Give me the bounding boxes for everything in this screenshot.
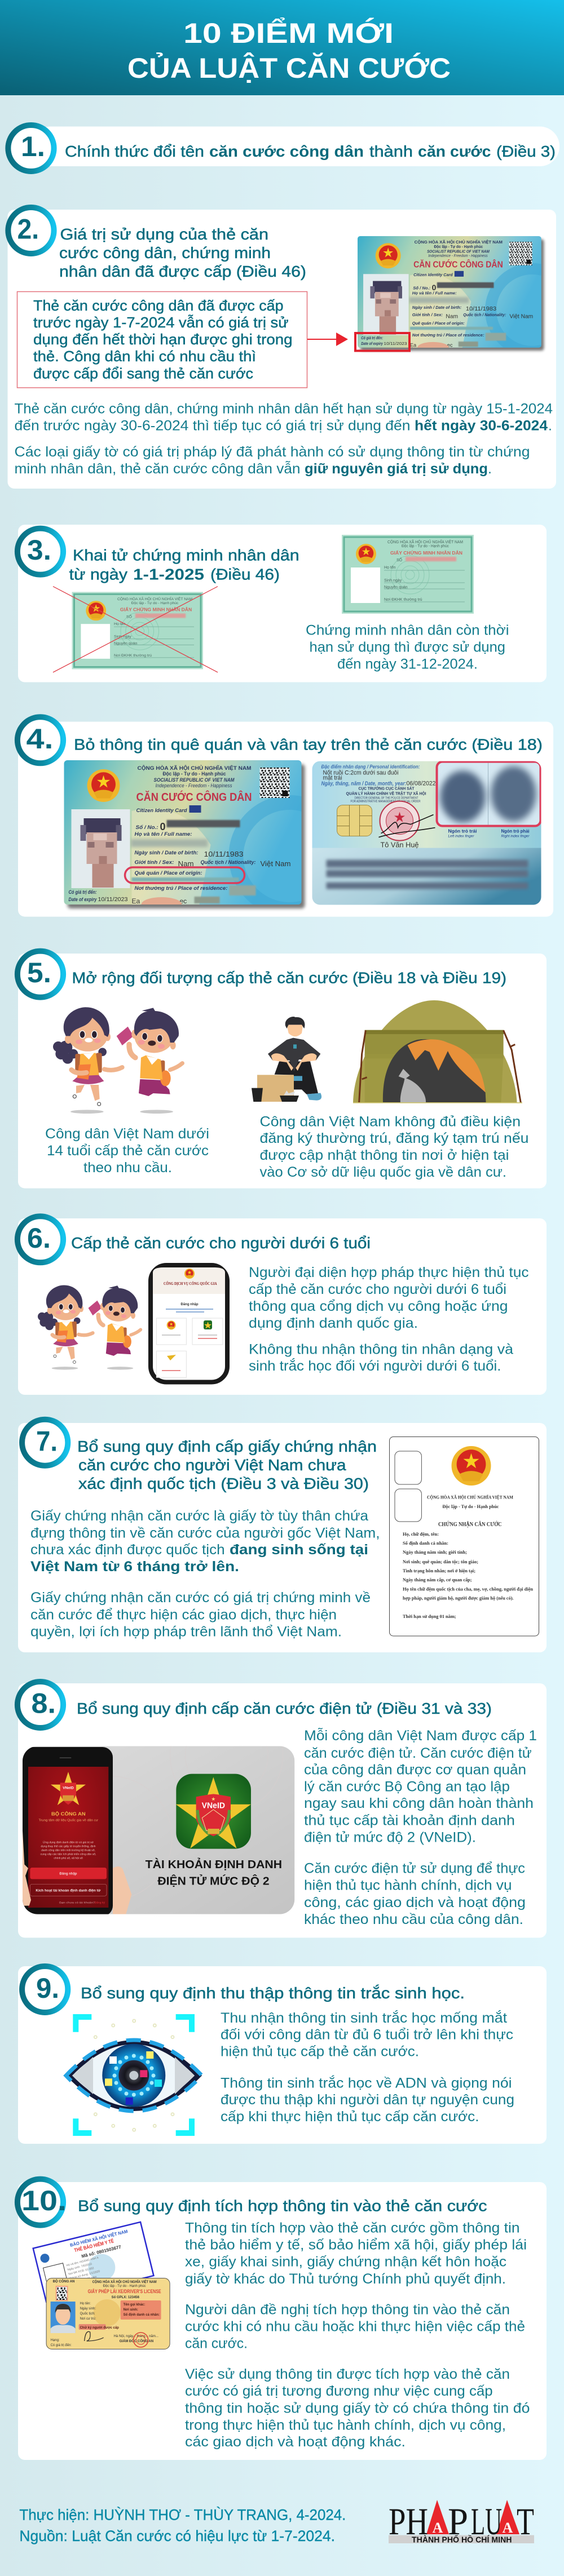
illustration: homeless man: [252, 1017, 321, 1102]
body text: đến trước ngày 30-6-2024 thì tiếp tục có giá trị sử dụng đến: [15, 418, 411, 433]
id card back: mặt trái: [323, 775, 342, 782]
panel: point 5: [17, 951, 547, 1189]
document: identity certificate: Số định danh cá nhân:: [403, 1540, 448, 1546]
id card front image: Họ và tên / Full name:: [412, 292, 457, 296]
id card front image: SOCIALIST REPUBLIC OF VIET NAM: [427, 250, 490, 254]
document: identity certificate: Thời hạn sử dụng 01 năm;: [403, 1613, 456, 1619]
heading: rename: thành: [369, 143, 413, 160]
heading: 1-1-2025: [133, 566, 204, 583]
id card back: Left index finger: [448, 835, 475, 839]
id card front: 10/11/1983: [204, 850, 244, 858]
callout box: được cấp đổi sang thẻ căn cước: [33, 365, 253, 382]
body text: Thu nhận thông tin sinh trắc học mống mắt: [221, 2010, 507, 2026]
id card front image: Date of expiry: [361, 342, 384, 346]
image: driver license: CỘNG HÒA XÃ HỘI CHỦ NGHĨA VIỆT NAM: [92, 2280, 157, 2284]
header banner: [0, 0, 564, 95]
title: [127, 17, 451, 84]
badge: number 10: [17, 2179, 67, 2225]
body text: hiện thủ tục cấp thẻ căn cước.: [221, 2044, 419, 2060]
body text: [221, 2010, 514, 2125]
document: identity certificate: hợp pháp, người giám hộ, người được giám hộ (nếu có).: [403, 1595, 514, 1601]
panel: point 10: [17, 2179, 547, 2460]
valid id card: GIẤY CHỨNG MINH NHÂN DÂN: [390, 550, 462, 556]
id card front: Ea: [132, 897, 140, 905]
heading: rename: [65, 143, 556, 160]
old id card crossed: Nguyên quán: [114, 641, 137, 645]
image: VNeID app: dụng thay thế các giấy tờ truyền thống, định: [41, 1845, 96, 1848]
illustration: children: [38, 1285, 140, 1369]
body text: chưa xác định được quốc tịch: [30, 1542, 225, 1558]
id card front image: CĂN CƯỚC CÔNG DÂN: [413, 260, 503, 270]
image: driver license: Số GPLX: 123456: [112, 2295, 140, 2299]
old id card crossed: Độc lập - Tự do - Hạnh phúc: [131, 601, 179, 605]
body text: [30, 1508, 380, 1640]
document: identity certificate: CỘNG HÒA XÃ HỘI CHỦ NGHĨA VIỆT NAM: [427, 1495, 513, 1500]
body text: Người dân đề nghị tích hợp thông tin vào thẻ căn: [185, 2302, 510, 2317]
body text: căn cước.: [185, 2336, 248, 2352]
text: children: 14 tuổi cấp thẻ căn cước: [47, 1143, 209, 1159]
old id card crossed: CỘNG HÒA XÃ HỘI CHỦ NGHĨA VIỆT NAM: [117, 596, 192, 601]
image: VNeID app: ĐIỆN TỬ MỨC ĐỘ 2: [157, 1874, 270, 1887]
red cross: [53, 587, 218, 672]
id card back: Ngón trỏ phải: [501, 829, 529, 834]
id card back: 06/08/2022: [406, 781, 435, 787]
image: VNeID app: chính phủ số, xã hội số: [54, 1856, 83, 1860]
body text: cấp khi thực hiện thủ tục cấp căn cước.: [221, 2109, 479, 2125]
text: children: theo nhu cầu.: [83, 1160, 172, 1176]
logo: Pháp Luật: A: [503, 2520, 513, 2536]
body text: khác theo nhu cầu của công dân.: [304, 1912, 523, 1927]
valid id card: Độc lập - Tự do - Hạnh phúc: [402, 544, 449, 548]
badge: number 4: [17, 717, 63, 763]
text: under 6: sinh trắc học đối với người dưới 6 tuổi.: [249, 1358, 501, 1374]
valid id card: Nguyên quán: [384, 586, 408, 589]
body text: căn cước để thực hiện các giao dịch, thực hiện: [30, 1607, 337, 1623]
callout box: [17, 292, 307, 388]
image: VNeID app: danh công dân trên môi trường kỹ thuật số,: [41, 1848, 95, 1852]
text: children: Công dân Việt Nam dưới: [45, 1126, 209, 1142]
text: under 6: dụng định danh quốc gia.: [249, 1315, 418, 1331]
image: driver license: Có giá trị đến:: [51, 2344, 72, 2347]
body text: đối với công dân từ đủ 6 tuổi trở lên khi thực: [221, 2027, 513, 2043]
panel: point 8: [17, 1682, 547, 1937]
id card back: CỤC TRƯỞNG CỤC CẢNH SÁT: [359, 786, 415, 791]
heading: [77, 1438, 377, 1492]
image: VNeID app: Trung tâm dữ liệu Quốc gia về dân cư: [38, 1819, 98, 1823]
credits: Thực hiện: HUỲNH THƠ - THÙY TRANG, 4-2024.: [19, 2506, 346, 2524]
image: VNeID app: [23, 1746, 294, 1914]
body text: Giấy chứng nhận căn cước có giá trị chứng minh về: [30, 1590, 371, 1606]
text: validity note: Chứng minh nhân dân còn thời: [306, 623, 509, 639]
callout box: trước ngày 1-7-2024 vẫn có giá trị sử: [33, 314, 289, 331]
id card front: SOCIALIST REPUBLIC OF VIET NAM: [153, 777, 235, 783]
valid id card: Nơi ĐKHK thường trú: [384, 598, 422, 602]
id card front image: 10/11/1983: [466, 306, 497, 312]
body text: Thông tin tích hợp vào thẻ căn cước gồm thông tin: [185, 2220, 520, 2236]
body text: của công dân được cơ quan quản: [304, 1762, 526, 1778]
badge: number 5: 5.: [27, 957, 51, 988]
text: children: [45, 1126, 209, 1176]
document: identity certificate: Họ tên chữ đệm quốc tịch của cha, mẹ, vợ, chồng, người đại diện: [403, 1586, 533, 1592]
id card back: Right index finger: [501, 835, 530, 839]
phone mockup: public service portal: Đăng nhập: [180, 1303, 199, 1306]
body text: thẻ bảo hiểm y tế, số bảo hiểm xã hội, giấy phép lái: [185, 2237, 527, 2253]
logo: Pháp Luật: [389, 2500, 534, 2545]
credits: Nguồn: Luật Căn cước có hiệu lực từ 1-7-2024.: [19, 2528, 335, 2544]
id card front: Việt Nam: [261, 859, 291, 868]
logo: Pháp Luật: PH: [389, 2500, 428, 2543]
badge: number 8: 8.: [32, 1688, 56, 1719]
id card front image: Số / No.:: [413, 286, 430, 290]
panel: point 6: [17, 1216, 547, 1395]
old id card crossed: Họ tên: [114, 622, 126, 626]
body text: xe, giấy khai sinh, giấy chứng nhận kết hôn hoặc: [185, 2254, 506, 2270]
image: health insurance card: BẢO HIỂM XÃ HỘI VIỆT NAM: [69, 2229, 129, 2248]
heading: rename: (Điều 3): [496, 143, 556, 160]
icon: eye scan: [66, 2014, 202, 2136]
phone mockup: public service portal: [151, 1265, 227, 1382]
badge: number 6: [17, 1216, 63, 1262]
body text: ngay sau khi công dân hoàn thành: [304, 1795, 534, 1811]
image: driver license: Nơi cư trú:: [80, 2317, 96, 2321]
image: health insurance card: Ngày sinh: 7/6/2010: [67, 2263, 92, 2272]
panel: point 7: [18, 1420, 547, 1652]
image: driver license: BỘ CÔNG AN: [53, 2279, 74, 2284]
body text: giữ nguyên giá trị sử dụng: [305, 461, 488, 477]
image: VNeID app: VNeID: [202, 1801, 225, 1810]
valid id card: Sinh ngày: [384, 579, 402, 583]
id card front image: [358, 236, 564, 353]
highlight: expiry date: [355, 333, 409, 351]
body text: [304, 1727, 537, 1927]
logo: Pháp Luật: A: [433, 2520, 443, 2536]
id card front image: Citizen Identity Card: [413, 273, 453, 277]
image: driver license: Hạng:: [51, 2339, 60, 2342]
image: VNeID app: BỘ CÔNG AN: [51, 1811, 86, 1817]
body text: căn cước điện tử. Căn cước điện tử: [304, 1745, 532, 1761]
body text: .: [548, 418, 552, 433]
id card back: QUẢN LÝ HÀNH CHÍNH VỀ TRẬT TỰ XÃ HỘI: [346, 791, 426, 796]
logo: Pháp Luật: THÀNH PHỐ HỒ CHÍ MINH: [412, 2535, 512, 2545]
id card back: Đặc điểm nhân dạng / Personal identification:: [321, 764, 420, 770]
image: VNeID app: Đăng ký: [95, 1901, 105, 1904]
image: VNeID app: TÀI KHOẢN ĐỊNH DANH: [146, 1858, 282, 1871]
panel: point 2: [8, 207, 564, 489]
document: identity certificate: [389, 1437, 539, 1636]
valid id card: [342, 535, 474, 614]
id card front: 10/11/2023: [98, 897, 128, 903]
body text: quyền, lợi ích hợp pháp trên lãnh thổ Việt Nam.: [30, 1624, 342, 1640]
id card front image: Quê quán / Place of origin:: [412, 322, 465, 326]
id card front image: Nam: [446, 313, 458, 320]
id card front image: CỘNG HÒA XÃ HỘI CHỦ NGHĨA VIỆT NAM: [415, 240, 503, 245]
text: under 6: cấp thẻ căn cước cho người dưới 6 tuổi: [249, 1282, 506, 1297]
callout box: thẻ. Công dân khi có nhu cầu thì: [33, 348, 256, 365]
text: no residence: được cập nhật thông tin nơi ở hiện tại: [259, 1147, 509, 1163]
image: driver license: Độc lập - Tự do - Hạnh phúc: [103, 2285, 146, 2288]
id card front: CỘNG HÒA XÃ HỘI CHỦ NGHĨA VIỆT NAM: [138, 765, 252, 771]
badge: number 3: [17, 529, 63, 575]
document: identity certificate: CHỨNG NHẬN CĂN CƯỚC: [438, 1520, 502, 1528]
id card front: ec: [179, 897, 187, 905]
body text: Căn cước điện tử sử dụng để thực: [304, 1861, 525, 1877]
text: no residence: [259, 1114, 529, 1180]
illustration: children: [53, 1007, 182, 1114]
id card front image: Giới tính / Sex:: [412, 313, 443, 317]
id card front: CĂN CƯỚC CÔNG DÂN: [136, 790, 252, 804]
logo: Pháp Luật: LU: [471, 2500, 502, 2543]
id card front: 0: [160, 821, 166, 832]
badge: number 3: 3.: [27, 534, 51, 566]
heading: từ ngày: [69, 566, 127, 583]
document: identity certificate: Ngày tháng năm cấp, cơ quan cấp;: [403, 1577, 472, 1582]
body text: được thu thập khi người dân tự nguyện cung: [221, 2092, 514, 2108]
badge: number 4: 4.: [26, 723, 53, 755]
logo: Pháp Luật: P: [448, 2500, 468, 2543]
text: under 6: [249, 1265, 529, 1374]
id card front image: 0: [432, 283, 437, 292]
heading: Mở rộng đối tượng cấp thẻ căn cước (Điều 18 và Điều 19): [72, 969, 506, 987]
body text: cước khi có nhu cầu hoặc khi thực hiện việc cấp thẻ: [185, 2318, 525, 2334]
id card front: Họ và tên / Full name:: [134, 831, 192, 837]
panel: point 3: [17, 525, 547, 682]
id card back: Ngón trỏ trái: [448, 829, 477, 834]
image: health insurance card: Thời điểm đủ 05 năm: [70, 2274, 97, 2285]
image: VNeID app: Bạn chưa có tài khoản?: [59, 1901, 95, 1904]
text: under 6: Người đại diện hợp pháp thực hiện thủ tục: [249, 1265, 529, 1280]
text: validity note: đến ngày 31-12-2024.: [337, 656, 478, 672]
body text: Thẻ căn cước công dân, chứng minh nhân dân hết hạn sử dụng từ ngày 15-1-2024: [15, 401, 553, 417]
valid id card: CỘNG HÒA XÃ HỘI CHỦ NGHĨA VIỆT NAM: [387, 539, 463, 544]
body text: lý căn cước Bộ Công an tạo lập: [304, 1779, 510, 1794]
id card front: Giới tính / Sex:: [134, 859, 174, 865]
image: driver license: Hà Nội, ngày... tháng... năm...: [114, 2335, 158, 2338]
body text: Các loại giấy tờ có giá trị pháp lý đã phát hành có sử dụng thông tin từ chứng: [15, 444, 530, 460]
panel: point 1: [8, 125, 559, 171]
id card front image: Quốc tịch / Nationality:: [463, 313, 506, 317]
id card front: Quê quán / Place of origin:: [134, 870, 202, 876]
id card front image: Ea: [410, 342, 417, 348]
badge: number 2: 2.: [17, 214, 39, 245]
text: under 6: Không thu nhận thông tin nhân dạng và: [249, 1341, 513, 1357]
image: driver license: GIÁM ĐỐC CÔNG AN: [120, 2339, 153, 2343]
id card front: Nam: [178, 859, 194, 868]
credits: [19, 2506, 346, 2544]
badge: number 2: [8, 207, 54, 254]
id card front: Nơi thường trú / Place of residence:: [134, 885, 228, 891]
heading: Cấp thẻ căn cước cho người dưới 6 tuổi: [71, 1234, 371, 1252]
image: health insurance card: Nơi ĐK KCB: 01-002: [68, 2267, 95, 2276]
body text: thông tin hoặc sử dụng giấy tờ có chứa thông tin đó: [185, 2401, 530, 2417]
phone mockup: public service portal: CỔNG DỊCH VỤ CÔNG QUỐC GIA: [164, 1282, 217, 1286]
panel: point 9: [18, 1966, 547, 2144]
title: 10 ĐIỂM MỚI: [183, 17, 394, 49]
heading: nhân dân đã được cấp (Điều 46): [59, 263, 306, 280]
badge: number 9: [22, 1966, 68, 2012]
valid id card: SỐ: [396, 557, 403, 562]
old id card crossed: Sinh ngày: [114, 635, 131, 639]
id card front image: Ngày sinh / Date of birth:: [412, 306, 461, 310]
valid id card: Họ tên: [384, 566, 396, 570]
heading: Bổ sung quy định cấp căn cước điện tử (Điều 31 và 33): [77, 1700, 492, 1717]
badge: number 5: [17, 951, 63, 997]
body text: công, các giao dịch và hoạt động: [304, 1895, 526, 1910]
image: driver license: Ngày sinh:: [80, 2307, 96, 2311]
body text: điện tử mức độ 2 (VNeID).: [304, 1830, 476, 1846]
image: driver license: Chữ ký người được cấp: [80, 2326, 119, 2330]
body text: thủ tục cấp tài khoản định danh: [304, 1813, 515, 1829]
badge: number 7: [22, 1420, 68, 1466]
body text: Mỗi công dân Việt Nam được cấp 1: [304, 1727, 537, 1744]
text: no residence: vào Cơ sở dữ liệu quốc gia về dân cư.: [259, 1164, 506, 1180]
id card front: Date of expiry: [69, 897, 97, 902]
body text: Việt Nam từ 6 tháng trở lên.: [30, 1559, 239, 1575]
id card front: Có giá trị đến:: [69, 889, 97, 895]
id card back: DIRECTOR GENERAL OF THE POLICE DEPARTMENT: [354, 797, 418, 800]
body text: các giao dịch và hoạt động khác.: [185, 2434, 406, 2450]
image: VNeID app: Ứng dụng định danh điện tử có giá trị sử: [43, 1841, 94, 1845]
badge: number 9: 9.: [36, 1972, 59, 2004]
old id card crossed: GIẤY CHỨNG MINH NHÂN DÂN: [120, 607, 192, 613]
image: health insurance card: THẺ BẢO HIỂM Y TẾ: [73, 2237, 114, 2253]
heading: Khai tử chứng minh nhân dân: [73, 547, 299, 564]
badge: number 8: [17, 1682, 63, 1728]
heading: Bổ sung quy định thu thập thông tin trắc sinh học.: [81, 1984, 465, 2002]
body text: đang sinh sống tại: [230, 1542, 368, 1558]
text: validity note: hạn sử dụng thì được sử dụng: [309, 640, 505, 655]
title: CỦA LUẬT CĂN CƯỚC: [127, 52, 451, 84]
id card front image: 10/11/2023: [384, 341, 407, 346]
image: driver license: Nơi sinh:: [124, 2308, 138, 2312]
heading: (Điều 46): [210, 566, 280, 583]
old id card crossed: SỐ: [126, 613, 133, 619]
id card front image: ec: [447, 342, 453, 348]
image: health insurance card: Giá trị sử dụng: 1/1/2020: [69, 2269, 100, 2281]
text: under 6: thông qua cổng dịch vụ công hoặc ứng: [249, 1298, 508, 1314]
heading: [59, 225, 306, 280]
image: VNeID app: VNeID: [63, 1786, 74, 1790]
heading: rename: căn cước công dân: [209, 143, 364, 160]
image: health insurance card: [33, 2222, 153, 2302]
badge: number 1: 1.: [21, 131, 45, 162]
body text: trong thực hiện thủ tục hành chính, dịch vụ công,: [185, 2418, 506, 2433]
image: driver license: [46, 2278, 170, 2349]
heading: Giá trị sử dụng của thẻ căn: [60, 225, 268, 243]
body text: đựng thông tin về căn cước của người gốc Việt Nam,: [30, 1525, 380, 1541]
id card back: Tô Văn Huệ: [380, 841, 418, 849]
callout box: Thẻ căn cước công dân đã được cấp: [33, 297, 283, 314]
id card back: Ngày, tháng, năm / Date, month, year:: [321, 781, 406, 787]
image: driver license: Họ tên:: [80, 2302, 91, 2305]
document: identity certificate: Ngày tháng năm sinh; giới tính;: [403, 1549, 467, 1555]
text: no residence: đăng ký thường trú, đăng ký tạm trú nếu: [259, 1130, 529, 1146]
body text: cước có giá trị tương đương như việc cung cấp: [185, 2383, 493, 2399]
id card front image: Việt Nam: [509, 313, 533, 320]
heading: cước công dân, chứng minh: [59, 244, 271, 261]
id card back: [312, 761, 541, 905]
image: VNeID app: Kích hoạt tài khoản định danh điện tử: [36, 1890, 101, 1893]
illustration: tent: [353, 1000, 522, 1103]
id card front: Citizen Identity Card: [136, 808, 187, 813]
document: identity certificate: Độc lập - Tự do - Hạnh phúc: [442, 1504, 499, 1509]
body text: Việc sử dụng thông tin được tích hợp vào thẻ căn: [185, 2366, 510, 2382]
badge: number 10: 10.: [21, 2185, 67, 2216]
id card front: Quốc tịch / Nationality:: [201, 859, 256, 865]
body text: giấy tờ khác do Thủ tướng Chính phủ quyết định.: [185, 2271, 506, 2287]
badge: number 7: 7.: [36, 1426, 58, 1457]
id card front: [64, 760, 307, 911]
panel: point 4: [17, 717, 553, 917]
document: identity certificate: Tình trạng hôn nhân; nơi ở hiện tại;: [403, 1568, 475, 1573]
text: validity note: [306, 623, 509, 672]
id card back: Nốt ruồi C:2cm dưới sau đuôi: [323, 770, 398, 777]
heading: căn cước cho người Việt Nam chưa: [78, 1456, 346, 1474]
arrow: [307, 332, 348, 346]
image: driver license: GIẤY PHÉP LÁI XE/DRIVER'S LICENSE: [88, 2289, 161, 2294]
body text: Giấy chứng nhận căn cước là giấy tờ tùy thân chứa: [30, 1508, 368, 1524]
image: driver license: Số định danh cá nhân:: [124, 2313, 160, 2317]
image: health insurance card: Mã số: 0801503677: [81, 2244, 122, 2259]
image: driver license: Tên gọi khác:: [124, 2303, 145, 2307]
body text: hết ngày 30-6-2024: [415, 418, 548, 433]
image: VNeID app: cung cấp các tiện ích phát triển công dân số,: [41, 1852, 96, 1856]
id card front: Independence - Freedom - Happiness: [156, 783, 232, 788]
heading: [69, 547, 299, 583]
id card front: Độc lập - Tự do - Hạnh phúc: [162, 771, 226, 777]
old id card crossed: [72, 592, 203, 669]
id card back: FOR ADMINISTRATIVE MANAGEMENT OF SOCIAL ORDER: [351, 800, 421, 804]
image: health insurance card: Họ và tên: HOÀNG ANH A: [66, 2255, 99, 2267]
body text: [185, 2220, 530, 2450]
heading: rename: Chính thức đổi tên: [65, 143, 204, 160]
image: VNeID app: Đăng nhập: [60, 1873, 77, 1876]
heading: Bổ sung quy định cấp giấy chứng nhận: [77, 1438, 377, 1455]
id card front image: Nơi thường trú / Place of residence:: [412, 334, 484, 338]
heading: Bỏ thông tin quê quán và vân tay trên thẻ căn cước (Điều 18): [74, 736, 543, 753]
image: driver license: Quốc tịch:: [80, 2312, 95, 2316]
badge: number 6: 6.: [27, 1222, 51, 1254]
id card front: Số / No.:: [135, 824, 158, 830]
document: identity certificate: Họ, chữ đệm, tên:: [403, 1531, 439, 1537]
text: no residence: Công dân Việt Nam không đủ điều kiện: [259, 1114, 521, 1129]
id card front image: Có giá trị đến:: [361, 336, 383, 340]
heading: Bổ sung quy định tích hợp thông tin vào thẻ căn cước: [78, 2197, 487, 2215]
badge: number 1: [8, 125, 54, 171]
body text: [15, 401, 553, 477]
body text: minh nhân dân, thẻ căn cước công dân vẫn: [15, 460, 300, 477]
callout box: dụng đến hết thời hạn được ghi trong: [33, 331, 292, 348]
id card front image: Độc lập - Tự do - Hạnh phúc: [434, 245, 483, 249]
heading: rename: căn cước: [418, 143, 491, 160]
body text: hiện thủ tục hành chính, dịch vụ: [304, 1878, 512, 1894]
id card front image: Independence - Freedom - Happiness: [428, 254, 488, 258]
body text: .: [488, 461, 492, 477]
body text: Thông tin sinh trắc học về ADN và giọng nói: [221, 2074, 512, 2091]
old id card crossed: Nơi ĐKHK thường trú: [114, 654, 152, 658]
id card front: Ngày sinh / Date of birth:: [134, 850, 199, 855]
heading: xác định quốc tịch (Điều 3 và Điều 30): [78, 1475, 369, 1492]
logo: Pháp Luật: T: [517, 2500, 534, 2543]
document: identity certificate: Nơi sinh; quê quán; dân tộc; tôn giáo;: [403, 1559, 478, 1564]
